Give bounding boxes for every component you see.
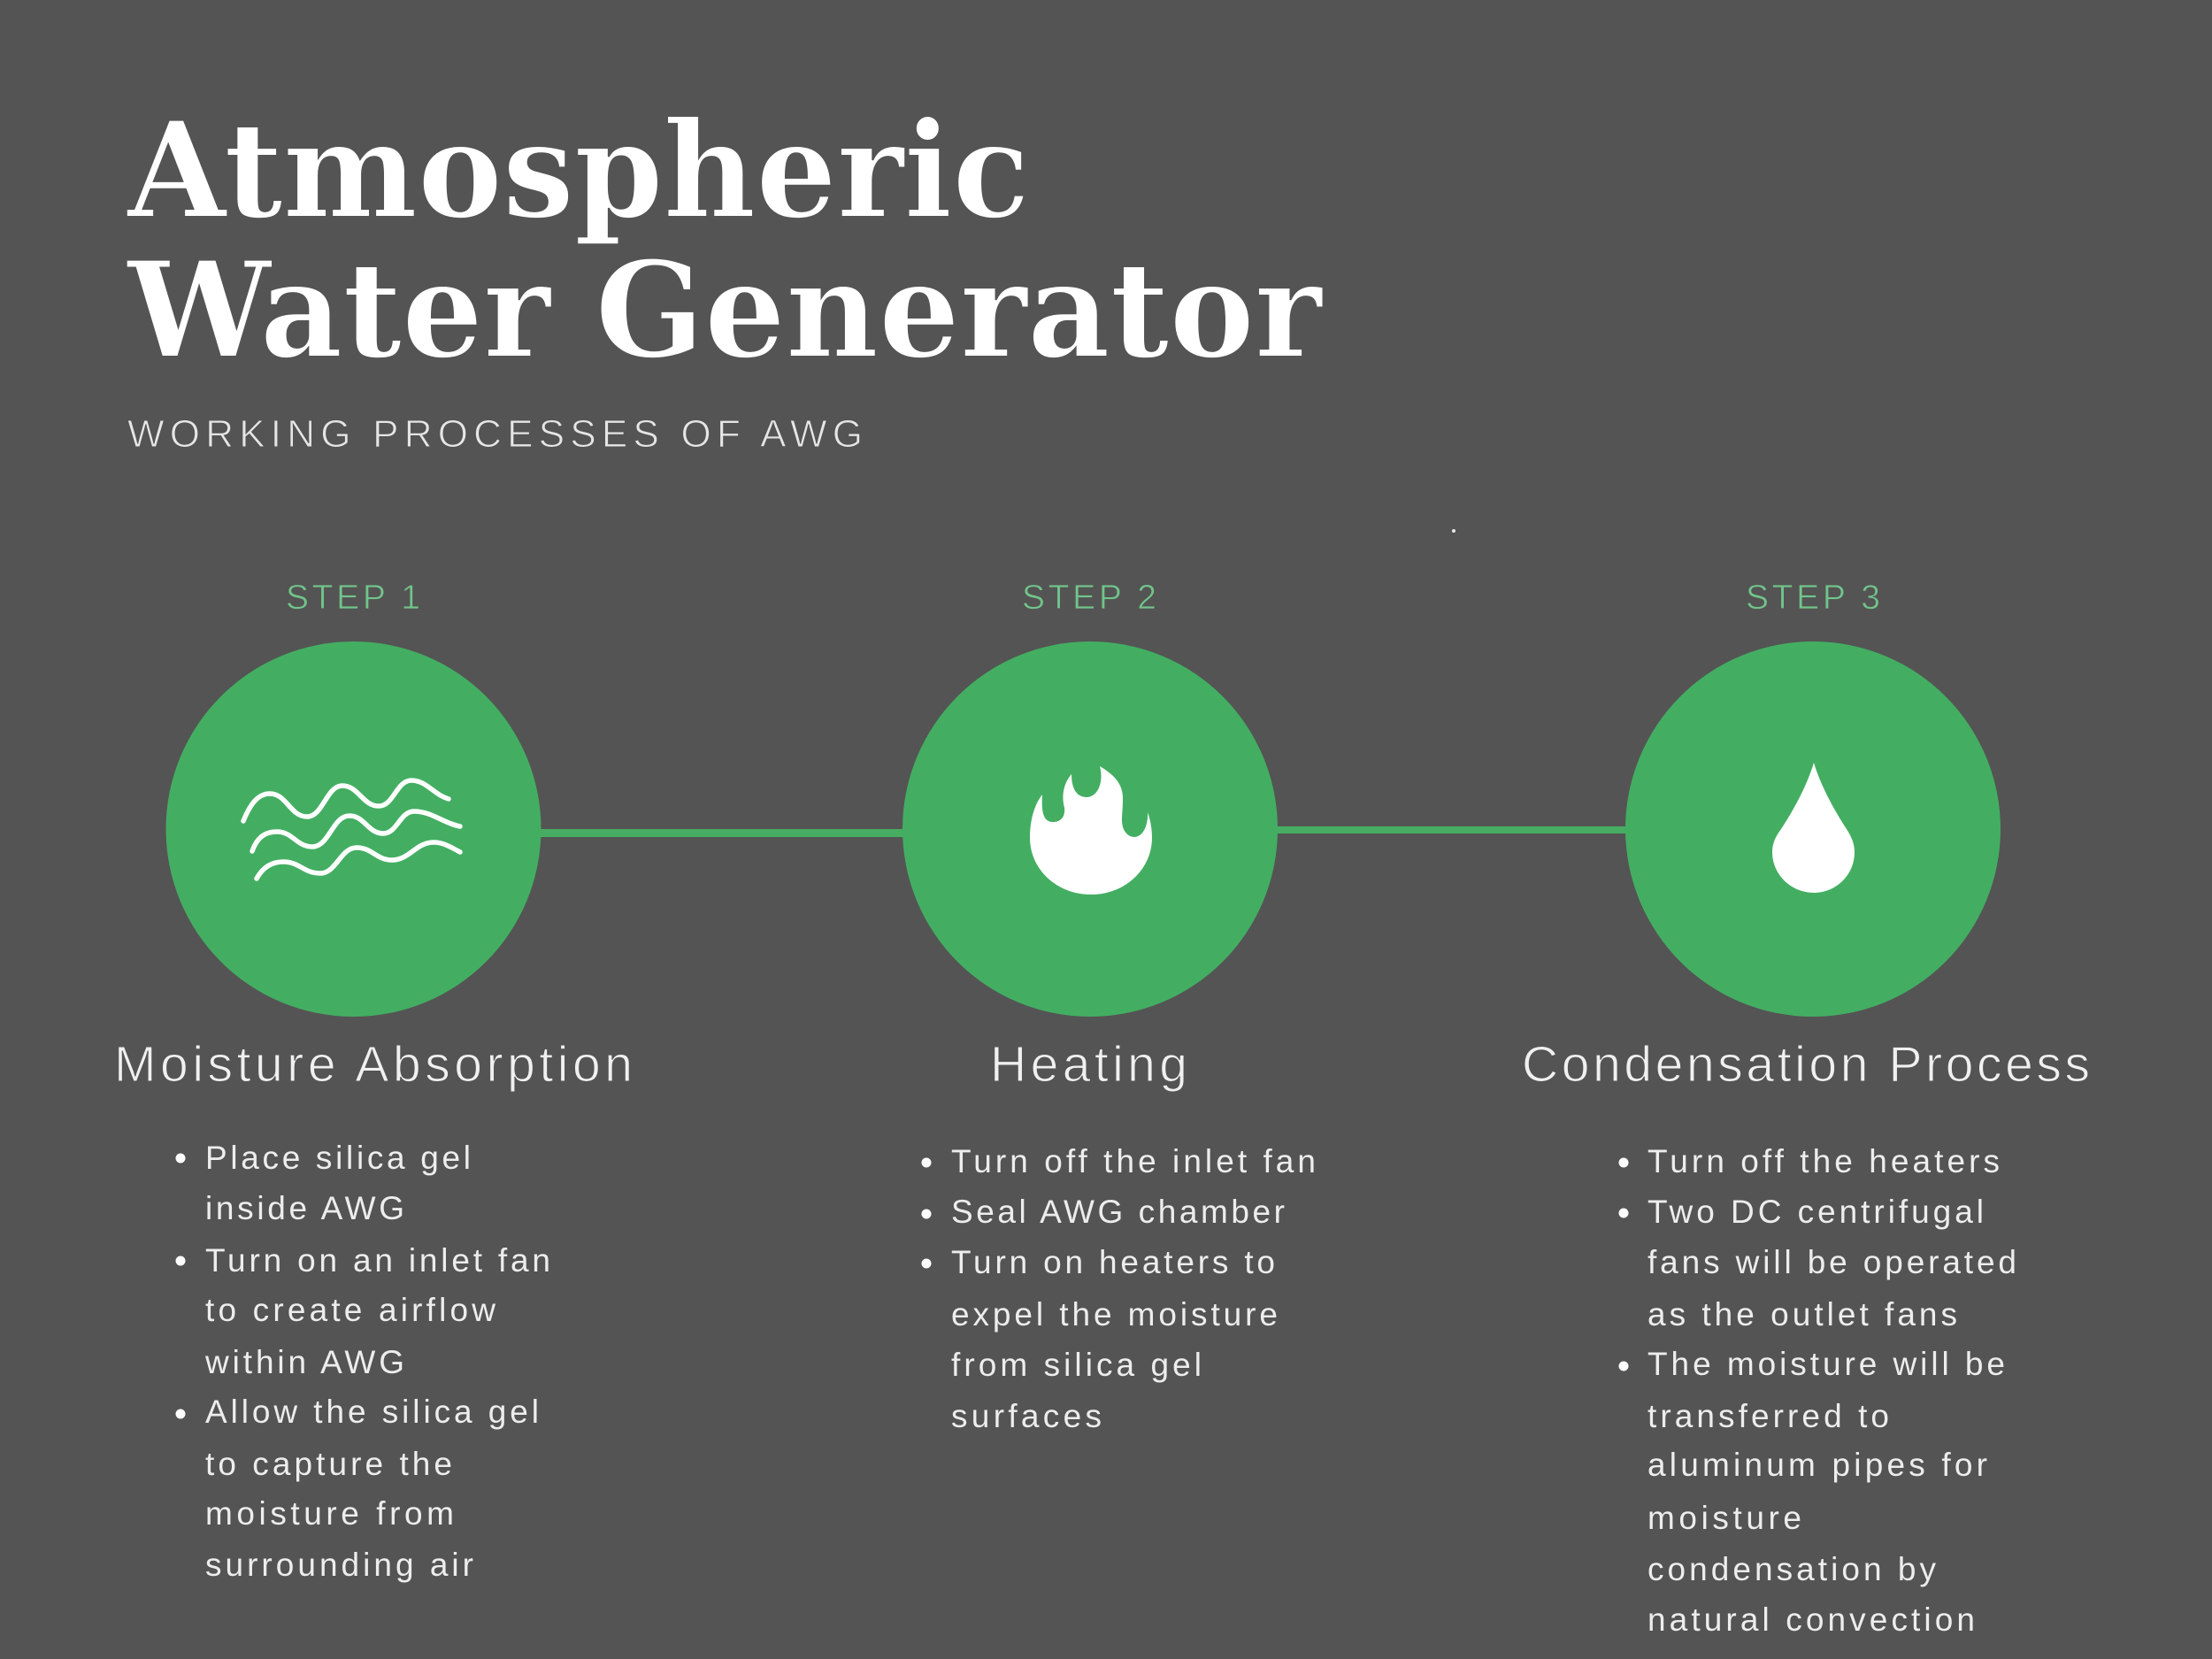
panel: step 1 moisture absorption bbox=[114, 579, 633, 1583]
step 3 bullet list: transferred to bbox=[1647, 1398, 1889, 1434]
title bbox=[126, 93, 1324, 388]
panel: step 2 heating bbox=[902, 579, 1316, 1434]
step 1 bullet list bbox=[175, 1140, 550, 1583]
step 3 label: STEP 3 bbox=[1746, 579, 1880, 617]
connector line: step 1 to step 2 bbox=[535, 829, 911, 837]
step 2 circle bbox=[902, 641, 1278, 1017]
icon: flame bbox=[1030, 766, 1152, 895]
step 3 heading: Condensation Process bbox=[1522, 1036, 2090, 1093]
step 3 bullet list: moisture bbox=[1647, 1500, 1801, 1536]
step 3 bullet list: aluminum pipes for bbox=[1647, 1447, 1987, 1483]
step 1 bullet list: Place silica gel bbox=[205, 1140, 471, 1176]
step 1 bullet list: Turn on an inlet fan bbox=[205, 1242, 550, 1279]
step 1 circle bbox=[166, 641, 541, 1017]
step 3 bullet list: The moisture will be bbox=[1647, 1346, 2005, 1382]
panel: step 3 condensation process bbox=[1522, 579, 2090, 1638]
step 2 heading: Heating bbox=[990, 1036, 1187, 1093]
connector line: step 2 to step 3 bbox=[1270, 826, 1632, 833]
step 2 bullet list bbox=[922, 1143, 1316, 1434]
step 3 bullet list: fans will be operated bbox=[1647, 1244, 2016, 1280]
icon: water drop bbox=[1772, 763, 1855, 893]
step 3 bullet list: as the outlet fans bbox=[1647, 1296, 1957, 1333]
step 2 bullet list: surfaces bbox=[951, 1398, 1102, 1434]
step 2 label: STEP 2 bbox=[1022, 579, 1156, 617]
step 3 bullet list: Two DC centrifugal bbox=[1647, 1194, 1984, 1230]
subtitle: WORKING PROCESSES OF AWG bbox=[127, 412, 863, 456]
step 3 bullet list: condensation by bbox=[1647, 1551, 1936, 1587]
step 1 bullet list: inside AWG bbox=[205, 1190, 404, 1226]
icon: water waves bbox=[243, 780, 460, 879]
step 2 bullet list: from silica gel bbox=[951, 1347, 1202, 1383]
step 1 bullet list: moisture from bbox=[205, 1495, 454, 1532]
step 2 bullet list: Turn on heaters to bbox=[951, 1244, 1275, 1280]
step 2 bullet list: Seal AWG chamber bbox=[951, 1194, 1285, 1230]
small stray dot bbox=[1452, 529, 1455, 533]
step 1 bullet list: surrounding air bbox=[205, 1547, 473, 1583]
step 3 circle bbox=[1625, 641, 2001, 1017]
step 1 heading: Moisture Absorption bbox=[114, 1036, 633, 1093]
step 1 bullet list: to capture the bbox=[205, 1446, 452, 1482]
step 2 bullet list: expel the moisture bbox=[951, 1296, 1278, 1333]
title: Atmospheric bbox=[126, 93, 1030, 249]
step 3 bullet list bbox=[1619, 1143, 2016, 1638]
step 1 bullet list: Allow the silica gel bbox=[205, 1394, 539, 1430]
step 1 bullet list: to create airflow bbox=[205, 1292, 495, 1328]
step 3 bullet list: natural convection bbox=[1647, 1601, 1975, 1638]
step 2 bullet list: Turn off the inlet fan bbox=[951, 1143, 1316, 1179]
step 1 label: STEP 1 bbox=[286, 579, 420, 617]
step 3 bullet list: Turn off the heaters bbox=[1647, 1143, 2000, 1179]
title: Water Generator bbox=[126, 233, 1324, 388]
step 1 bullet list: within AWG bbox=[204, 1344, 404, 1380]
